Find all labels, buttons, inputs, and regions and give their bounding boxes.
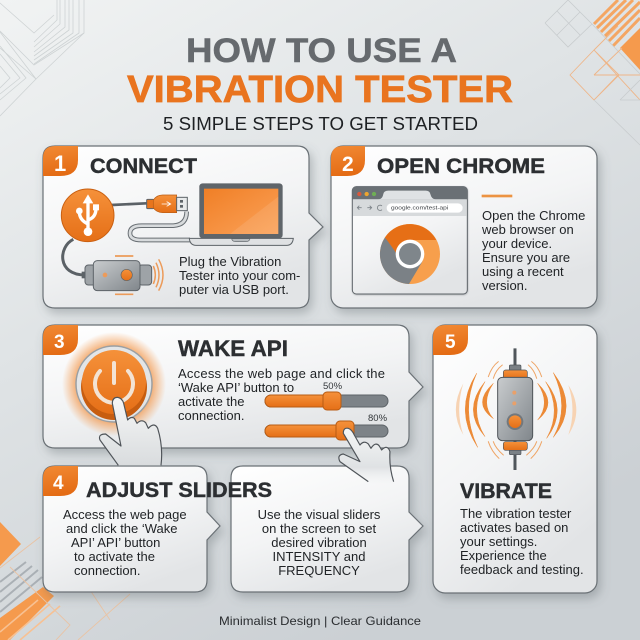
text: step 3: Access the web page and click the — [178, 366, 385, 381]
text: step 5: your settings. — [460, 534, 537, 549]
text: step 4: and click the ‘Wake — [66, 521, 178, 536]
illustration: usb, laptop and tester — [61, 183, 293, 294]
slider: 80 percent: 80% — [368, 413, 388, 424]
slider: 50 percent: 50% — [323, 381, 343, 392]
step badge 1: 1 — [54, 151, 66, 176]
heading: connect: CONNECT — [90, 155, 197, 178]
text: step 4: Access the web page — [63, 507, 187, 522]
text: sliders description: desired vibration — [271, 535, 367, 550]
text: step 2: using a recent — [482, 264, 564, 279]
step badge 3: 3 — [54, 332, 65, 353]
step badge 4: 4 — [53, 473, 64, 494]
panel: step 5 vibrate — [433, 325, 597, 593]
title: HOW TO USE A — [186, 32, 457, 70]
icon: hand pressing power button — [99, 397, 162, 465]
text: sliders description: FREQUENCY — [278, 563, 360, 578]
decoration: bottom-left diamonds — [0, 522, 130, 640]
heading: adjust sliders: ADJUST SLIDERS — [86, 479, 272, 502]
text: step 1: Tester into your com- — [179, 268, 300, 283]
heading: open chrome: OPEN CHROME — [377, 155, 545, 178]
panel: step 2 open chrome — [331, 146, 597, 308]
illustration: browser window with chrome logo: google.com/test-api — [391, 206, 448, 212]
power button — [62, 332, 166, 436]
text: step 2: Open the Chrome — [482, 208, 585, 223]
step badge 4 — [43, 466, 78, 496]
panel: step 4 adjust sliders — [43, 466, 220, 592]
step badge 2 — [331, 146, 365, 176]
text: sliders description: INTENSITY and — [273, 549, 365, 564]
text: step 5: The vibration tester — [460, 506, 572, 521]
step badge 5: 5 — [445, 332, 456, 353]
text: step 3: activate the — [178, 394, 244, 409]
panel: step 3 wake api — [43, 325, 423, 448]
step badge 1 — [43, 146, 78, 176]
text: step 2: your device. — [482, 236, 552, 251]
step badge 2: 2 — [342, 153, 354, 176]
text: step 4: to activate the — [74, 549, 155, 564]
illustration: browser window with chrome logo — [352, 187, 512, 294]
text: step 4: connection. — [74, 563, 140, 578]
heading: wake api: WAKE API — [178, 336, 288, 361]
step badge 3 — [43, 325, 78, 355]
illustration: vibrating tester — [456, 348, 576, 470]
text: step 3: ‘Wake API’ button to — [178, 380, 294, 395]
text: sliders description: on the screen to set — [262, 521, 376, 536]
text: step 2: Ensure you are — [482, 250, 570, 265]
title: VIBRATION TESTER — [127, 69, 513, 111]
slider: 80 percent — [265, 413, 388, 440]
text: step 1: puter via USB port. — [179, 282, 289, 297]
text: step 4: API’ API’ button — [71, 535, 160, 550]
step badge 5 — [433, 325, 468, 355]
text: step 5: Experience the — [460, 548, 547, 563]
decoration: top-right diamonds — [545, 0, 640, 145]
decoration: top-left chevrons — [0, 0, 84, 116]
text: sliders description: Use the visual sliders — [258, 507, 381, 522]
title: 5 SIMPLE STEPS TO GET STARTED — [163, 114, 478, 134]
text: step 1: Plug the Vibration — [179, 254, 281, 269]
icon: hand on slider — [339, 428, 395, 484]
text: step 2: web browser on — [481, 222, 574, 237]
slider: 50 percent — [265, 381, 388, 410]
title — [127, 32, 513, 134]
text: step 5: activates based on — [460, 520, 568, 535]
heading: vibrate: VIBRATE — [460, 480, 552, 503]
panel: step 4 sliders description — [231, 466, 423, 592]
text: step 3: connection. — [178, 408, 244, 423]
text: step 2: version. — [482, 278, 528, 293]
text: step 5: feedback and testing. — [460, 562, 584, 577]
footer: Minimalist Design | Clear Guidance — [219, 614, 421, 628]
panel: step 1 connect — [43, 146, 323, 308]
